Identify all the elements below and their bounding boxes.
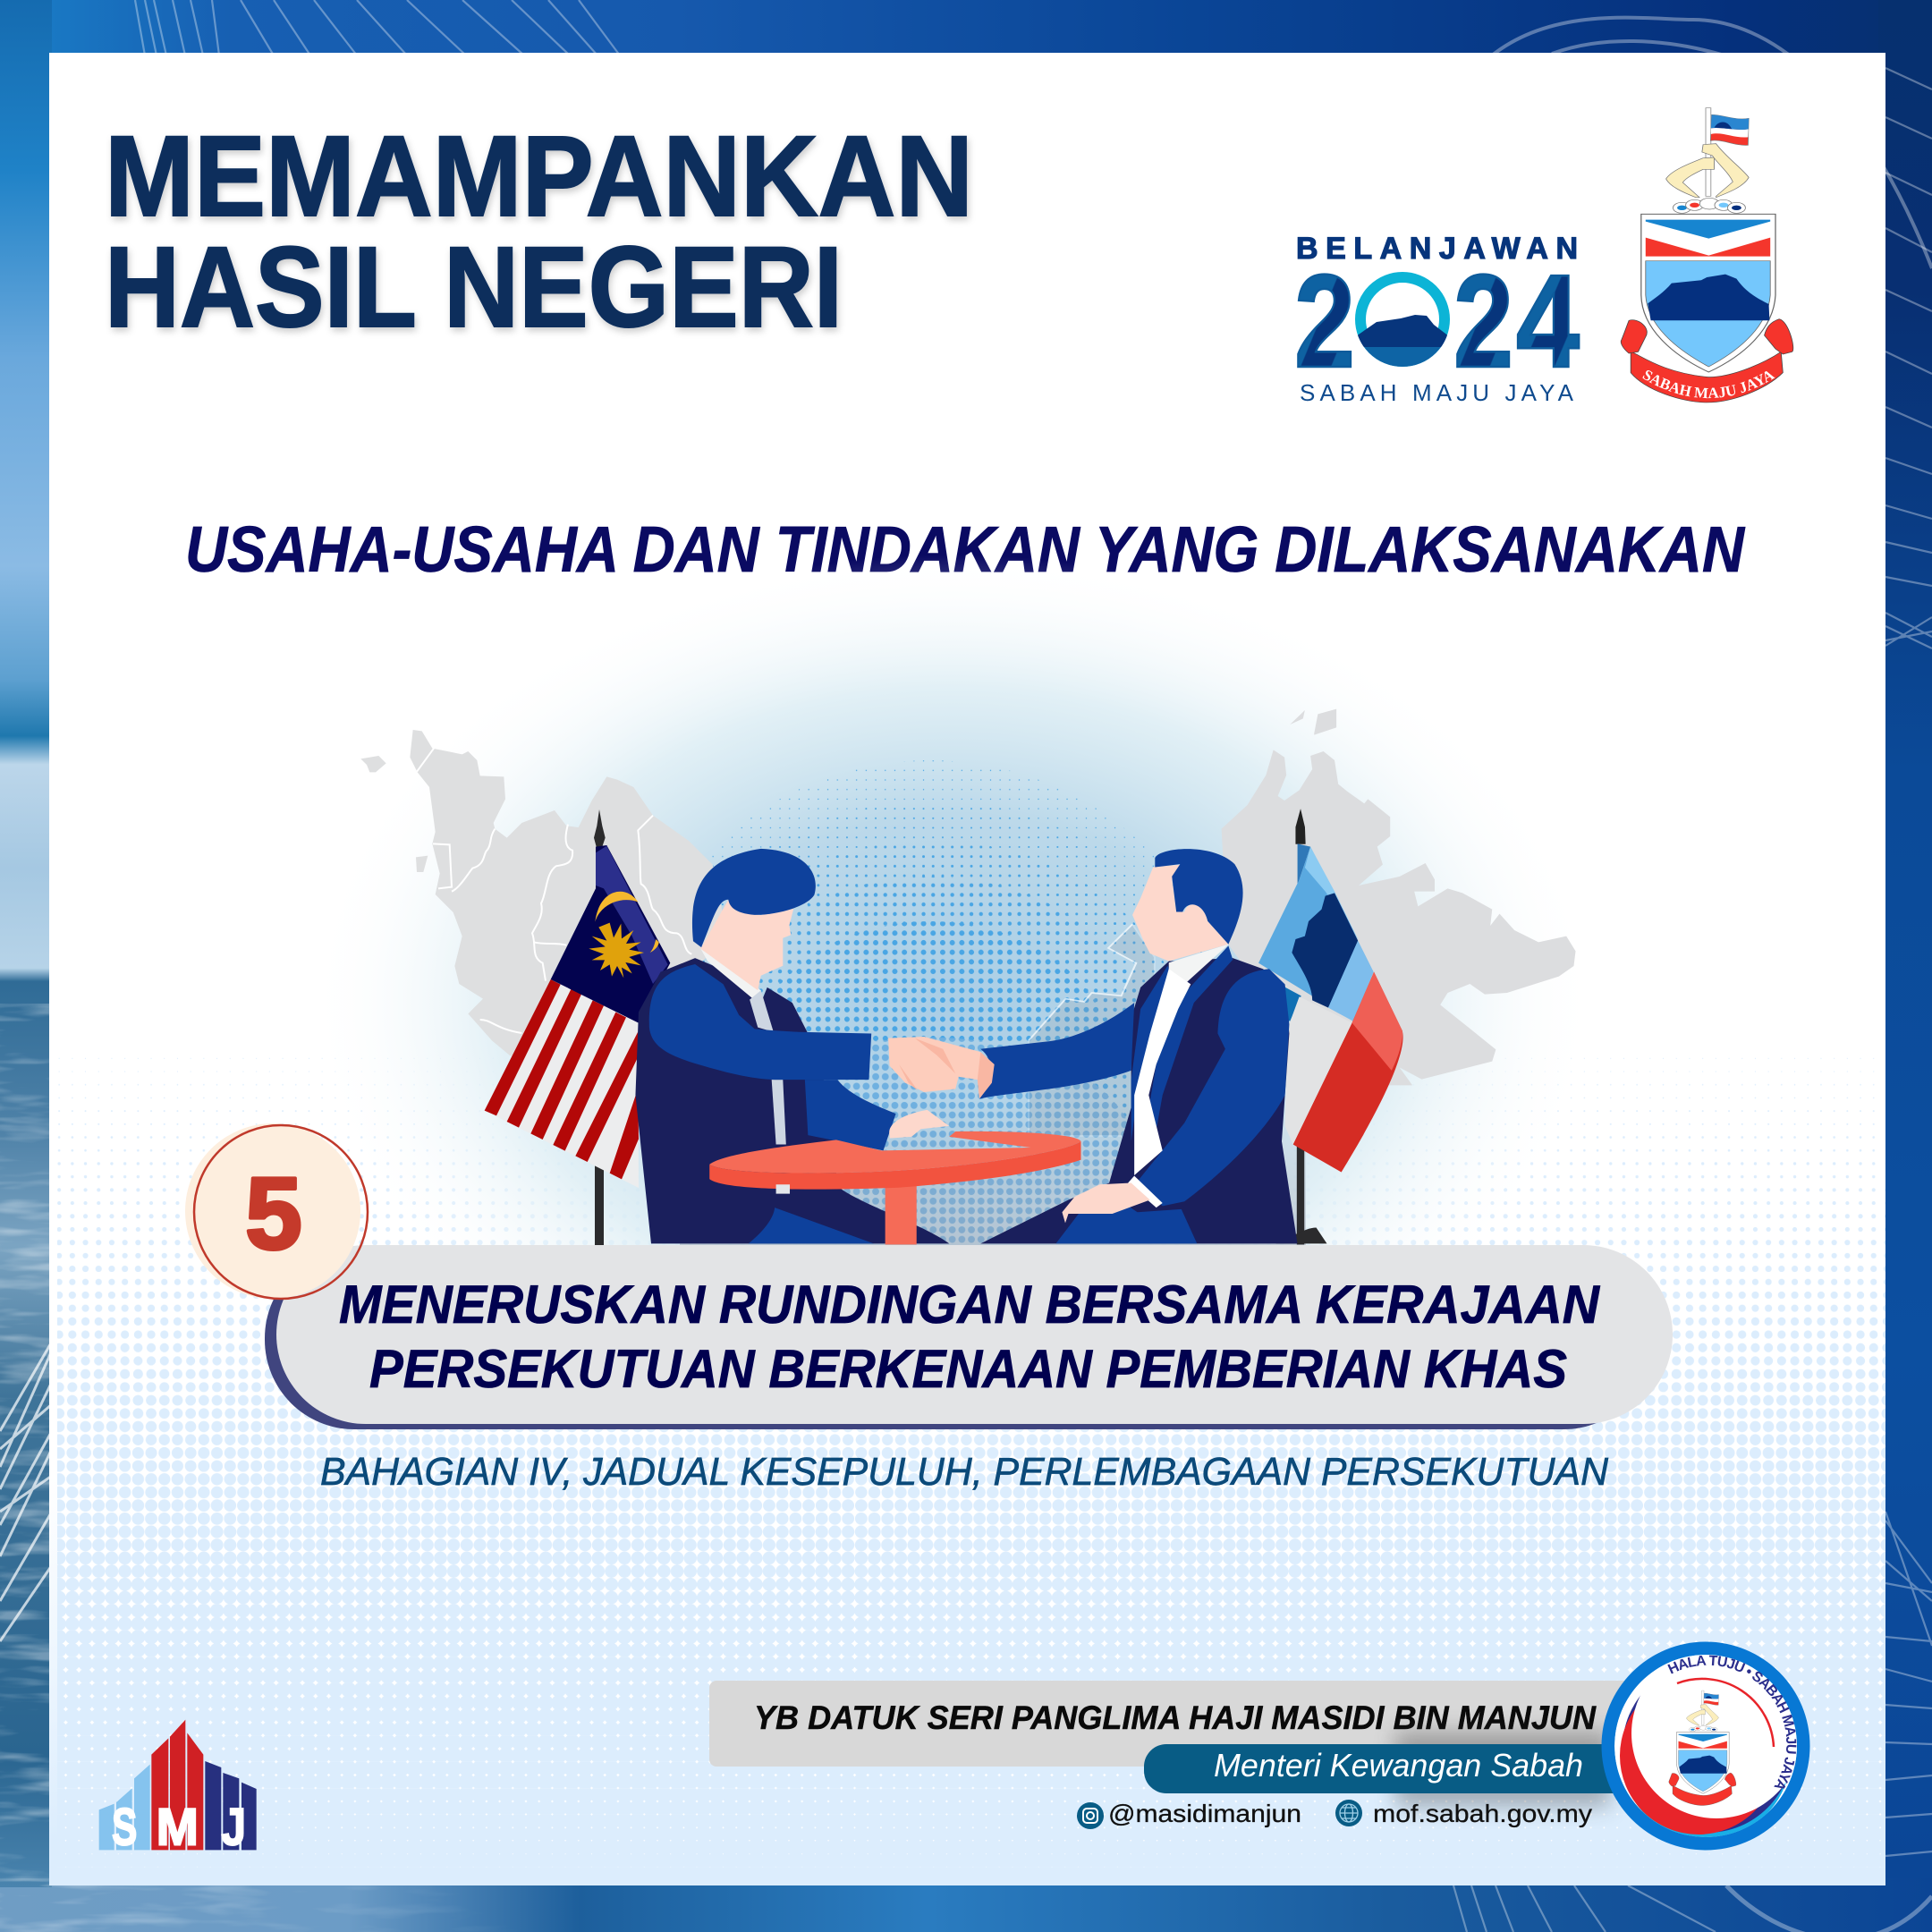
logo: Belanjawan 2024: SABAH MAJU JAYA — [1300, 379, 1574, 406]
title: MEMAMPANKAN — [105, 113, 973, 241]
panel: main statement pill — [265, 1245, 1673, 1429]
logo: Sabah state crest — [1621, 107, 1794, 402]
title — [105, 113, 973, 352]
social: instagram handle: @masidimanjun — [1108, 1800, 1301, 1827]
badge: Hala Tuju Sabah Maju Jaya: HALA TUJU • SABAH MAJU JAYA — [1667, 1655, 1796, 1789]
title: HASIL NEGERI — [105, 224, 843, 352]
logo: Belanjawan 2024: BELANJAWAN — [1296, 232, 1578, 266]
badge: Hala Tuju Sabah Maju Jaya — [1601, 1642, 1810, 1850]
subheading: constitution reference: BAHAGIAN IV, JADUAL KESEPULUH, PERLEMBAGAAN PERSEKUTUAN — [320, 1450, 1608, 1494]
social: website: mof.sabah.gov.my — [1373, 1800, 1592, 1827]
illustration: left businessman — [635, 849, 949, 1243]
logo: Belanjawan 2024: 2 — [1453, 248, 1513, 395]
icon: Malaysian flag with pole — [485, 809, 670, 1248]
number badge: 5 — [185, 1123, 368, 1299]
logo: Belanjawan 2024 — [1294, 232, 1580, 406]
logo: SMJ: M — [157, 1799, 199, 1857]
logo: Sabah state crest: SABAH MAJU JAYA — [1642, 370, 1775, 399]
number badge: 5: 5 — [245, 1157, 302, 1271]
illustration: right businessman — [979, 849, 1298, 1243]
illustration backdrop: glow and blue dot globe — [309, 555, 1597, 1449]
logo: SMJ — [99, 1720, 257, 1857]
minister title bar — [1144, 1732, 1628, 1807]
minister name bar — [709, 1681, 1640, 1767]
logo: SMJ: J — [221, 1799, 246, 1857]
illustration: handshake — [888, 1037, 995, 1099]
pill heading text: MENERUSKAN RUNDINGAN BERSAMA KERAJAAN — [339, 1275, 1601, 1335]
map: Peninsular Malaysia — [360, 730, 727, 1071]
pill heading text: PERSEKUTUAN BERKENAAN PEMBERIAN KHAS — [369, 1339, 1567, 1399]
heading: usaha-usaha: USAHA-USAHA DAN TINDAKAN YANG DILAKSANAKAN — [185, 514, 1746, 586]
logo: Belanjawan 2024: 2 — [1294, 248, 1355, 395]
illustration: red table with hand — [709, 1110, 1081, 1244]
logo: SMJ: S — [112, 1799, 137, 1857]
icon: Sabah flag with pole — [1258, 809, 1403, 1244]
minister title bar: Menteri Kewangan Sabah — [1214, 1747, 1583, 1784]
minister name bar: YB DATUK SERI PANGLIMA HAJI MASIDI BIN MANJUN — [754, 1699, 1597, 1736]
logo: Belanjawan 2024: 4 — [1516, 248, 1580, 395]
map: Sabah and Sarawak — [1029, 709, 1576, 1136]
pill heading text — [339, 1275, 1601, 1399]
